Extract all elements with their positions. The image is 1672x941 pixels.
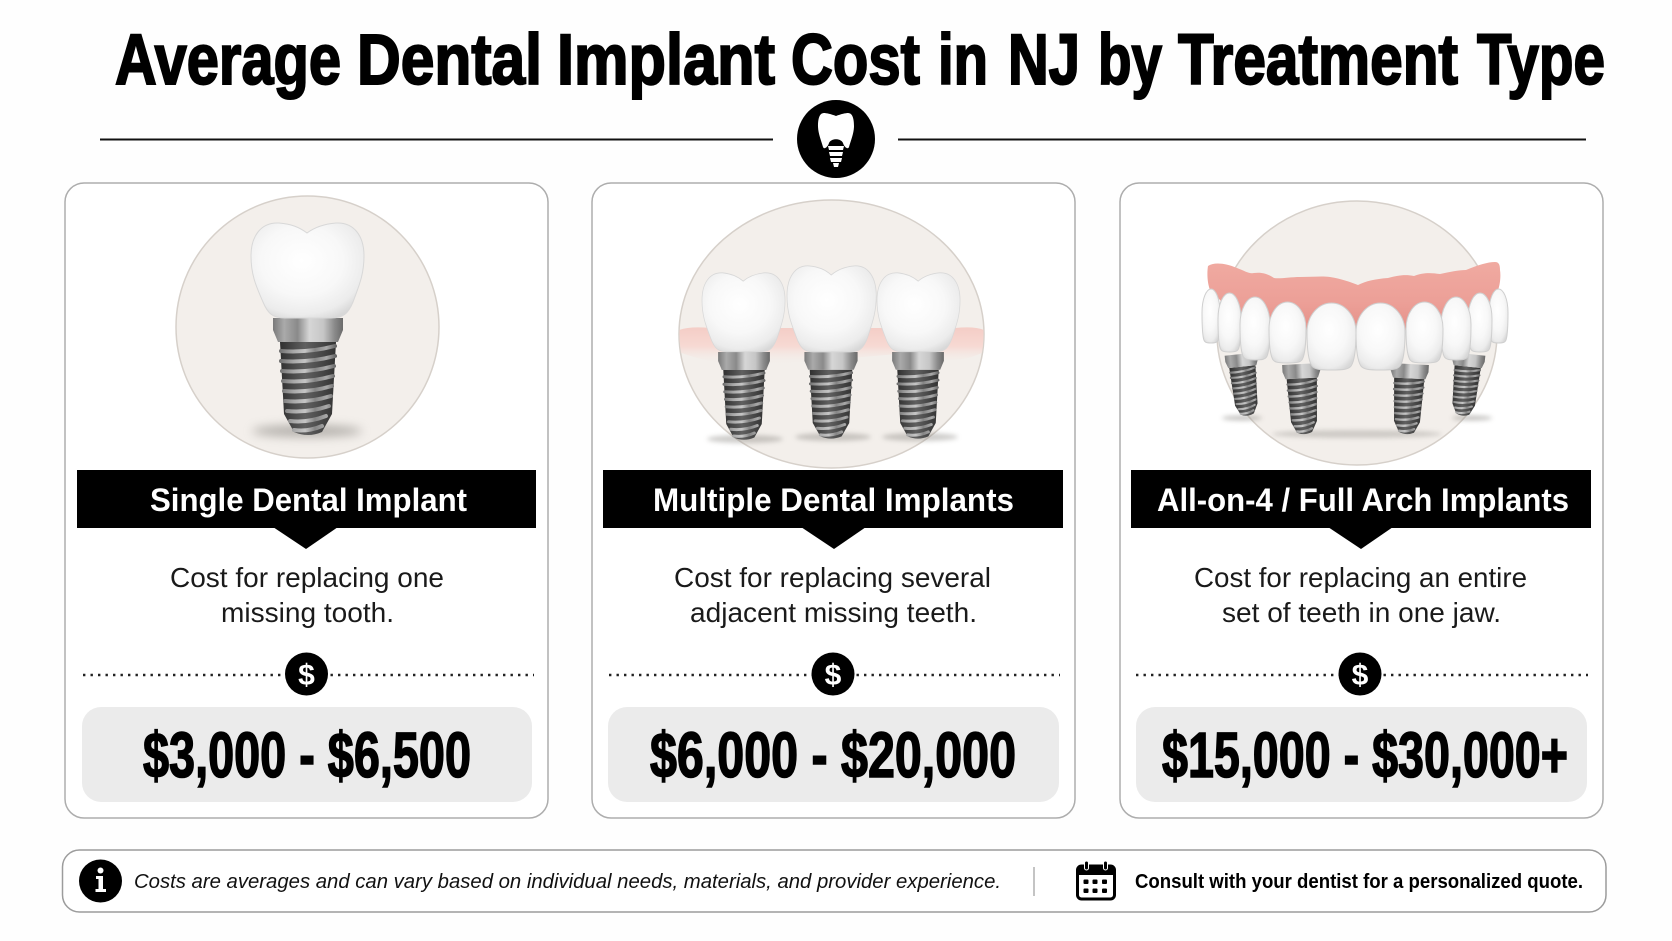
panel: single dental implant bbox=[65, 183, 548, 818]
dotted divider with dollar icon bbox=[1136, 652, 1588, 696]
description: Cost for replacing several bbox=[674, 562, 991, 593]
icon: tooth implant badge bbox=[797, 100, 875, 178]
illustration: three implants bbox=[679, 200, 984, 468]
title: in bbox=[938, 21, 988, 100]
heading bar: all-on-4 full arch implants bbox=[1131, 470, 1591, 549]
panel: multiple dental implants bbox=[592, 183, 1075, 818]
dotted divider with dollar icon: $ bbox=[298, 659, 315, 692]
title: Cost bbox=[791, 21, 920, 100]
description: set of teeth in one jaw. bbox=[1222, 597, 1501, 628]
title: NJ bbox=[1008, 21, 1080, 100]
title: Dental bbox=[357, 21, 542, 100]
panel: all-on-4 full arch implants bbox=[1120, 183, 1603, 818]
dotted divider with dollar icon bbox=[83, 652, 534, 696]
title: Type bbox=[1477, 21, 1605, 100]
title: Implant bbox=[557, 21, 775, 100]
description: missing tooth. bbox=[221, 597, 394, 628]
heading bar: multiple dental implants: Multiple Dental Implants bbox=[653, 482, 1014, 518]
consult text: Consult with your dentist for a personalized quote. bbox=[1135, 871, 1583, 893]
disclaimer text: Costs are averages and can vary based on individual needs, materials, and provider experience. bbox=[134, 871, 1001, 893]
description bbox=[674, 562, 991, 628]
title: Treatment bbox=[1178, 21, 1458, 100]
heading bar: single dental implant: Single Dental Implant bbox=[150, 482, 467, 518]
illustration: single implant bbox=[176, 196, 439, 458]
heading bar: all-on-4 full arch implants: All-on-4 / Full Arch Implants bbox=[1157, 482, 1569, 518]
price: single implant: $3,000 - $6,500 bbox=[143, 719, 471, 791]
title: by bbox=[1098, 21, 1162, 100]
description: Cost for replacing one bbox=[170, 562, 444, 593]
title: Average bbox=[115, 21, 341, 100]
dotted divider with dollar icon: $ bbox=[1352, 659, 1369, 692]
footer note bar bbox=[62, 850, 1606, 912]
description bbox=[1194, 562, 1527, 628]
dotted divider with dollar icon bbox=[609, 652, 1060, 696]
illustration: full arch on four implants bbox=[1202, 201, 1508, 465]
price: full arch bbox=[1136, 707, 1587, 802]
description: Cost for replacing an entire bbox=[1194, 562, 1527, 593]
price: multiple implants: $6,000 - $20,000 bbox=[650, 719, 1016, 791]
dotted divider with dollar icon: $ bbox=[825, 659, 842, 692]
price: single implant bbox=[82, 707, 532, 802]
header divider with tooth icon bbox=[100, 100, 1586, 178]
description: adjacent missing teeth. bbox=[690, 597, 977, 628]
icon: info bbox=[79, 860, 122, 902]
icon: calendar bbox=[1077, 861, 1115, 899]
description bbox=[170, 562, 444, 628]
heading bar: multiple dental implants bbox=[603, 470, 1063, 549]
heading bar: single dental implant bbox=[77, 470, 536, 549]
price: multiple implants bbox=[608, 707, 1059, 802]
